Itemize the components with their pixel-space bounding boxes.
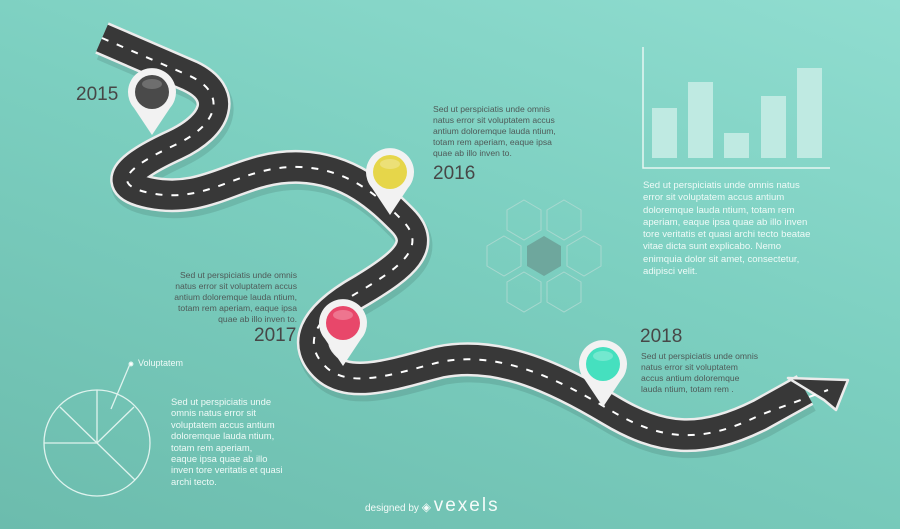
text 2016: antium doloremque lauda ntium, xyxy=(433,126,556,136)
text 2017: natus error sit voluptatem accus xyxy=(175,281,297,291)
year 2017: 2017 xyxy=(254,325,296,346)
text 2017: quae ab illo inven to. xyxy=(218,314,297,324)
text right: aperiam, eaque ipsa quae ab illo inven xyxy=(643,217,807,228)
text 2016: natus error sit voluptatem accus xyxy=(433,115,555,125)
text 2018: lauda ntium, totam rem . xyxy=(641,384,734,394)
text right: tore veritatis et quasi archi tecto beatae xyxy=(643,229,810,240)
text 2016: totam rem aperiam, eaque ipsa xyxy=(433,137,552,147)
pin 2015 xyxy=(128,68,176,135)
year 2015: 2015 xyxy=(76,84,118,105)
text pie: Sed ut perspiciatis unde xyxy=(171,396,271,407)
text 2016 xyxy=(433,104,556,158)
pin 2018 xyxy=(579,340,627,407)
text right: doloremque lauda ntium, totam rem xyxy=(643,205,794,216)
text 2016: Sed ut perspiciatis unde omnis xyxy=(433,104,550,114)
text pie: voluptatem accus antium xyxy=(171,419,275,430)
text pie xyxy=(171,396,283,487)
text 2017: totam rem aperiam, eaque ipsa xyxy=(178,303,297,313)
road xyxy=(102,38,848,440)
pie label: Voluptatem xyxy=(138,358,183,368)
watermark: designed by ◈ vexels xyxy=(365,495,500,516)
text pie: doloremque lauda ntium, xyxy=(171,430,274,441)
text right: vitae dicta sunt explicabo. Nemo xyxy=(643,241,781,252)
text pie: archi tecto. xyxy=(171,476,217,487)
pin 2016 xyxy=(366,148,414,215)
text 2018 xyxy=(641,351,758,394)
text 2018: natus error sit voluptatem xyxy=(641,362,738,372)
text right: adipisci velit. xyxy=(643,266,697,277)
pie chart xyxy=(44,362,150,496)
text 2016: quae ab illo inven to. xyxy=(433,148,512,158)
text 2017: antium doloremque lauda ntium, xyxy=(174,292,297,302)
year 2018: 2018 xyxy=(640,326,682,347)
text 2017: Sed ut perspiciatis unde omnis xyxy=(180,270,297,280)
pin 2017 xyxy=(319,299,367,366)
hexagons xyxy=(487,200,601,312)
text pie: totam rem aperiam, xyxy=(171,442,252,453)
text pie: omnis natus error sit xyxy=(171,407,256,418)
bar chart xyxy=(643,47,830,168)
text right: error sit voluptatem accus antium xyxy=(643,192,784,203)
text right xyxy=(643,180,810,277)
text pie: inven tore veritatis et quasi xyxy=(171,464,283,475)
text pie: eaque ipsa quae ab illo xyxy=(171,453,267,464)
text right: enimquia dolor sit amet, consectetur, xyxy=(643,254,799,265)
text right: Sed ut perspiciatis unde omnis natus xyxy=(643,180,800,191)
text 2018: accus antium doloremque xyxy=(641,373,739,383)
text 2018: Sed ut perspiciatis unde omnis xyxy=(641,351,758,361)
text 2017 xyxy=(174,270,297,324)
year 2016: 2016 xyxy=(433,163,475,184)
